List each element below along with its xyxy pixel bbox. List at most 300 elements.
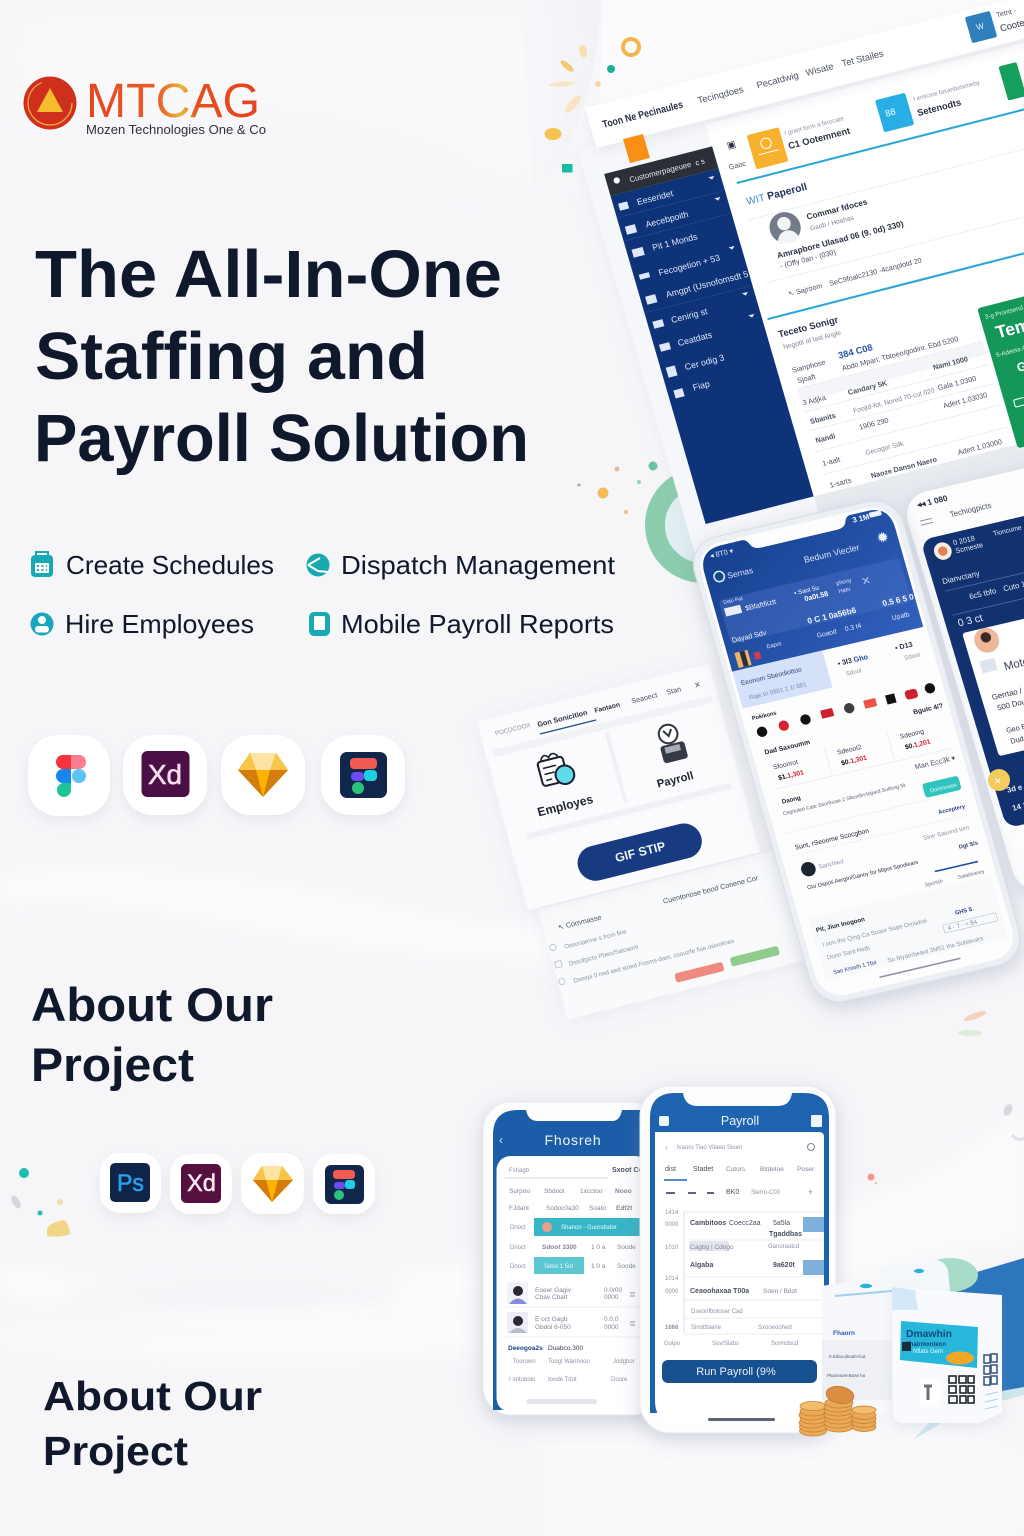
phone B table: Soen / Bdot — [763, 1288, 797, 1295]
phone A people rows: 0000 — [604, 1324, 619, 1331]
payroll table: 3 Adjka — [801, 393, 828, 407]
icon: sketch — [221, 735, 305, 815]
phone 1 stats: Man Ecc3k ▾ — [914, 753, 957, 771]
phone B table: Ganoraatcd — [768, 1244, 799, 1250]
phone 1 header: Goaod — [816, 628, 838, 640]
logo: Mozen Technologies One & Co — [86, 123, 266, 137]
icon: figma dark — [313, 1154, 375, 1214]
phone B table: Sov/Slabs — [712, 1341, 739, 1347]
phone A table: Fshagb — [509, 1168, 530, 1174]
section heading: about our project repeat: About Our — [43, 1373, 262, 1419]
modal lower card — [538, 847, 818, 1020]
phone 2 blue panel: 6c5 tbfo — [968, 586, 997, 601]
phone 1 header: 0 C 1 0a56b6 — [806, 606, 858, 626]
icon: adobe xd: Xd — [187, 1170, 216, 1197]
phone 1 header: ✹ — [875, 529, 891, 547]
payroll table: Negotit of last Angle — [782, 330, 842, 351]
decorations: green ring and dots — [578, 462, 751, 573]
phone 1 stats — [763, 708, 957, 804]
phone 1 details list: Our Dspos Aergtn/Ganoy for Mtpnt Spndiears — [807, 860, 919, 891]
phone B table: Ceaoohaxaa T00a — [690, 1288, 749, 1295]
phone 1 footer: Sao Krooth 1 Tfot — [833, 960, 878, 976]
phone 1 details list: Dgt S/s — [958, 840, 979, 851]
phone 2 blue panel: Tioncume — [992, 524, 1023, 538]
phone 1 tab strip — [732, 629, 924, 709]
phone A table: Dnoct — [510, 1264, 526, 1270]
phone B table: Goipo — [664, 1341, 681, 1347]
stat tiles — [720, 62, 1024, 176]
phone 2 card — [962, 586, 1024, 756]
button: get started — [574, 820, 706, 884]
coin stacks — [799, 1384, 876, 1436]
phone A table: Surpoo — [509, 1188, 530, 1195]
phone B screen — [650, 1093, 829, 1425]
phone 1 details list: Sanchied — [818, 858, 845, 871]
phone 1 header: Bedum Viecler — [803, 542, 861, 565]
phone 1 tab strip: Raje tn 0881 1 1/ 881 — [748, 681, 808, 701]
sidebar: Cenirig st — [670, 306, 709, 325]
payroll table — [777, 282, 1012, 492]
phone 1 header: ◂ 8T0 ▾ — [709, 546, 735, 560]
phone 1 details list: Daong — [781, 795, 802, 806]
phone 1 header: Dsto Pat — [723, 596, 744, 606]
phone B tabs — [664, 1142, 815, 1197]
sidebar: Pit 1 Monds — [651, 231, 699, 253]
phone 2 status: ◂◂ 1 080 — [915, 494, 949, 510]
phone 2 body — [900, 441, 1024, 897]
phone 1 header: Eapot — [766, 641, 783, 650]
coin stack left — [799, 1402, 826, 1436]
icon: figma dark — [321, 735, 405, 815]
phone 1 header: $Bfaftfiiztt — [744, 597, 777, 613]
icon: photoshop — [100, 1153, 161, 1213]
phone 2 lower values — [1006, 782, 1024, 813]
phone 1 quick icons: Pokikons — [751, 711, 777, 722]
payroll table: Candary 5K — [847, 378, 889, 397]
phone A table: Sdoo 1 5ot — [544, 1264, 573, 1270]
product box small: Fhaorn — [833, 1330, 855, 1337]
icon: mobile — [309, 612, 330, 636]
phone A people rows: 0.0/00 — [604, 1287, 622, 1294]
payroll table: 1-sarts — [829, 475, 853, 490]
phone 2 lower values: 3d e — [1006, 782, 1024, 795]
phone A footer rows: I ontobolo — [509, 1377, 536, 1383]
phone 1 header: 0a0t.58 — [803, 589, 829, 603]
phone 1 header: ✕ — [860, 575, 873, 589]
payroll table: Teceto Sonigr — [777, 315, 840, 339]
stat tiles: 88 — [884, 107, 897, 119]
feature: hire employees: Hire Employees — [65, 609, 254, 639]
top navigation bar: Tetnt - — [995, 6, 1018, 19]
phone B table: 0000 — [665, 1289, 679, 1295]
lower phone A — [483, 1102, 661, 1415]
section heading: about our project — [31, 978, 273, 1091]
phone 1 footer: Donn Sant Hetb — [826, 945, 871, 961]
modal card — [477, 657, 818, 1022]
phone 1 tab strip: Eeonom Sbeodiottoo — [740, 666, 803, 687]
modal background — [477, 664, 760, 910]
phone A footer rows — [508, 1345, 635, 1404]
phone A screen — [493, 1110, 650, 1412]
phone B frame — [640, 1086, 836, 1433]
phone 2 blue panel: Dianvctany — [941, 569, 981, 586]
feature: create schedules: Create Schedules — [66, 550, 274, 580]
phone A footer rows: Ioode Tdot — [548, 1377, 577, 1383]
phone B table: 0000 — [665, 1222, 679, 1228]
phone A frame — [483, 1102, 661, 1415]
payroll table: Abdo Mpan; Tbtoeo/godinr. Ebd 5200 — [841, 334, 959, 373]
title: Payroll Solution — [34, 401, 529, 476]
icon: figma — [28, 735, 110, 816]
icon: dispatch — [306, 554, 330, 576]
phone 1 details list: Acceptery — [938, 804, 967, 816]
stat tiles: C1 Ootemnent — [787, 126, 851, 151]
tile: employees: Employes — [536, 792, 595, 819]
sidebar: Eeseridet — [636, 188, 675, 207]
payroll table: Naoze Dansn Naero — [870, 455, 939, 480]
phone 1 stats: $0.1,201 — [904, 739, 932, 751]
phone A table: FJdant — [509, 1205, 529, 1212]
product box large — [877, 1260, 1002, 1423]
button: run payroll — [662, 1360, 817, 1383]
phone A table: Sodoc0a30 — [546, 1205, 579, 1212]
feature: mobile payroll reports: Mobile Payroll Reports — [341, 609, 614, 639]
phone B tabs: BK0 — [726, 1189, 739, 1196]
phone A table: Sdoot 3300 — [542, 1244, 577, 1251]
phone 2 blue panel: Scmeste — [954, 540, 984, 555]
phone 1 stats: Sdeoing — [899, 728, 925, 741]
payroll table: 1-aalt — [821, 455, 841, 468]
coin stack center — [824, 1384, 855, 1432]
phone B table: 5a5la — [773, 1220, 790, 1227]
phone 1 header: phony — [836, 578, 852, 587]
phone B tabs: dist — [665, 1166, 676, 1173]
phone B table: 1414 — [665, 1210, 679, 1216]
icon: adobe xd — [170, 1154, 232, 1214]
phone A footer rows: Toorown — [513, 1359, 536, 1365]
icon: employee — [30, 612, 54, 636]
dashboard panel — [567, 0, 1024, 563]
phone 1 tab strip: Sdoot — [845, 667, 863, 678]
phone A screen: ‹ — [499, 1133, 503, 1147]
phone A table: Dnoct — [510, 1245, 526, 1251]
phone 1 stats: Dad Saxoumm — [764, 739, 811, 756]
phone 1 details list: Satadeaney — [957, 869, 986, 881]
modal tabs: × — [693, 680, 702, 692]
sidebar: Ceatdats — [677, 330, 714, 348]
phone 1 frame — [686, 495, 1024, 1008]
modal tabs: Faotaon — [594, 702, 621, 715]
box banner — [900, 1321, 978, 1368]
phone 1 header: 0.5 6 5 0 — [881, 592, 915, 608]
top navigation bar: Pecatdwig — [755, 70, 800, 90]
top navigation bar: Wisate — [804, 61, 835, 78]
phone B tabs: ‹ — [665, 1142, 668, 1152]
phone 2 blue panel: 0 3 ct — [957, 613, 984, 629]
decorations: left confetti — [9, 1168, 70, 1237]
stat tiles: I enticine faxanbotxmeby — [912, 79, 982, 103]
box banner: Nflats Gem — [913, 1349, 943, 1355]
phone 2 blue panel — [920, 484, 1024, 828]
phone B screen: Payroll — [721, 1114, 759, 1128]
phone 1 footer: Pit, Jiun Inogoon — [815, 916, 866, 934]
phone 1 footer: GHS S — [955, 907, 973, 917]
phone A table: 1 0 a — [591, 1263, 606, 1270]
feature list — [30, 550, 616, 639]
phone A footer rows: Jodgbor — [613, 1359, 635, 1365]
product box small: Ploonnont-Bose ho — [827, 1373, 866, 1378]
phone 1 details list: Donmoase — [930, 782, 958, 794]
title: Staffing and — [35, 319, 428, 394]
modal tabs: Seaoect — [630, 690, 658, 705]
icon: gold coin badge — [988, 769, 1010, 791]
logo: MTCAG — [86, 75, 260, 128]
phone 1 quick icons — [751, 674, 944, 752]
phone A people rows: 0.0.0 — [604, 1316, 619, 1323]
top navigation bar: Toon Ne Pecinaules — [601, 100, 685, 131]
phone B table: Algaba — [690, 1262, 713, 1269]
top navigation bar — [585, 0, 1024, 148]
top navigation bar: Tet Stailes — [840, 48, 885, 69]
phone 1 tab strip: Sdoot — [903, 651, 921, 662]
phone 1 header: Sernas — [726, 566, 754, 581]
employee profile — [741, 101, 1024, 303]
phone A footer rows: Toogt Wanhooo — [548, 1359, 590, 1365]
phone B table: Cagbg | Cdogo — [690, 1244, 734, 1251]
modal tabs: Gon Sonicition — [536, 708, 588, 729]
phone B table: Cambitoos — [690, 1220, 726, 1227]
phone 2 status — [914, 485, 993, 526]
tile: payroll — [643, 722, 695, 791]
tool icons row 1 — [28, 735, 405, 816]
phone A table — [505, 1167, 649, 1274]
payroll table: Gala 1.0300 — [937, 374, 977, 392]
phone 1 header — [698, 506, 923, 672]
phone 1 footer: I oon the Qing Ca Soaor Sope Omsdoe — [822, 917, 929, 949]
icon: sketch — [241, 1153, 304, 1214]
stat tiles: ▣ — [726, 139, 737, 151]
title — [34, 237, 529, 476]
phone B table: Sxooeoohed — [758, 1325, 792, 1331]
section heading: about our project: About Our — [31, 978, 273, 1031]
icon: calendar — [31, 552, 53, 577]
blue backdrop — [913, 1258, 1024, 1440]
phone 1 header: Dayad Sdv — [731, 628, 768, 645]
checklist: Dseepi 0 ned aed stoed Fosms-daet, cooutrfe fise osivolines — [573, 938, 735, 985]
sidebar — [604, 146, 814, 524]
sidebar: Fecogetion + 53 — [657, 252, 721, 278]
phone B table — [664, 1210, 824, 1347]
phone A people rows: Cbav Cbatt — [535, 1294, 568, 1301]
phone A footer rows: Doore — [611, 1377, 628, 1383]
phone A people rows: Gbdoi 6-050 — [535, 1324, 571, 1331]
sidebar: Cer odig 3 — [683, 352, 726, 372]
phone B table: Sormdocd — [771, 1341, 798, 1347]
phone A table: Edf2t — [616, 1205, 633, 1212]
product box small: 0 trdca-dnoeb-fcot — [829, 1354, 866, 1359]
phone A people rows: E oct Gagb — [535, 1316, 568, 1323]
phone 1 stats: Sdeoot2 — [836, 744, 863, 757]
payroll table: 384 C08 — [837, 342, 874, 361]
section heading: about our project: Project — [31, 1038, 194, 1091]
top navigation bar: Tecinqdoes — [696, 84, 745, 106]
decorations: top sparkle — [544, 39, 639, 172]
phone A table: Dnoct — [510, 1225, 526, 1231]
phone 1 header: ▪ Saot 5u — [793, 584, 820, 597]
phone A people rows: 0000 — [604, 1294, 619, 1301]
employee profile: SeC9foalc2130 -4canplotd 20 — [828, 256, 923, 288]
product box small — [822, 1281, 892, 1413]
feature: dispatch management: Dispatch Management — [341, 550, 616, 580]
green promo card — [977, 278, 1024, 448]
phone A table: Shanon - Guondsdor — [561, 1225, 617, 1231]
box stamp — [920, 1380, 940, 1407]
home indicator — [880, 958, 961, 977]
phone 1 details list: Cegnoted Cate Seorfouse 2 Sfeonfin-fogard Sotfong 5k — [782, 783, 907, 817]
stat tiles: Setenodts — [916, 97, 962, 118]
payroll table: Adert 1.03030 — [942, 390, 988, 410]
phone A people rows — [505, 1282, 640, 1337]
box banner: Fhairmonteon — [906, 1342, 946, 1348]
icon: adobe xd — [123, 735, 207, 815]
phone A footer rows: Duabco.300 — [548, 1345, 583, 1352]
checklist — [544, 873, 774, 988]
decorations: lower right — [868, 1009, 1024, 1184]
payroll table: 1906 290 — [858, 416, 890, 432]
phone B tabs: Poser — [797, 1166, 815, 1173]
icon: photoshop: Ps — [117, 1170, 144, 1197]
employee profile: WIT Paperoll — [745, 182, 809, 208]
phone B tabs: Stadet — [693, 1166, 713, 1173]
phone B table: Sinottbaine — [691, 1325, 722, 1331]
payroll table: Sjoaft — [796, 372, 816, 385]
phone 1 header: 3 1M — [851, 512, 870, 525]
payroll table: Gecogor Sdk — [865, 440, 905, 457]
checklist: Ossonperne s from fine — [564, 928, 628, 951]
payroll table: Adert 1.03000 — [957, 437, 1003, 457]
box banner: Dmawhin — [906, 1329, 952, 1340]
title: The All-In-One — [35, 237, 502, 312]
section heading: about our project repeat — [43, 1373, 262, 1474]
red bar — [674, 962, 725, 983]
phone 1 footer: 4 · 7 · + $4 — [947, 918, 979, 932]
phone A table: 1xcctoo — [580, 1188, 603, 1195]
icon: adobe xd: Xd — [148, 759, 182, 790]
section heading: about our project repeat: Project — [43, 1428, 188, 1474]
logo — [24, 75, 266, 137]
phone 1 details list: Sunt, rSeoome Scocgbon — [794, 828, 870, 852]
sidebar: c s — [694, 156, 706, 167]
phone A table: Soode — [617, 1244, 636, 1251]
phone A table: Soode — [617, 1263, 636, 1270]
phone 1 quick icons: Bgutc 4/? — [912, 703, 944, 716]
phone A table: Soato — [589, 1205, 606, 1212]
phone 1 header: Upatb — [891, 611, 911, 622]
phone 1 footer: So Mydorbeted 3M51 the Sotsteolrs — [887, 935, 984, 964]
sidebar: Amgpt (Usnofomsdt 5 — [665, 269, 750, 300]
phone 1 center — [686, 495, 1024, 1008]
phone A table: Sxoot Cow — [612, 1167, 649, 1174]
phone 2 right — [900, 439, 1024, 897]
phone B table: 1666 — [665, 1325, 679, 1331]
checklist: ↖ Commasse — [557, 912, 602, 932]
modal tabs — [488, 678, 713, 757]
phone 2 status: Techiogpicts — [949, 501, 993, 519]
coin stack right — [852, 1406, 876, 1432]
tool icons row 2 — [100, 1153, 375, 1214]
payroll table: Nandi — [814, 431, 836, 445]
phone 1 details list: Sine Saeond lorn — [922, 824, 971, 842]
sidebar: Aecebpoith — [644, 209, 690, 230]
box qr codes — [949, 1354, 997, 1403]
phone 2 blue panel: 0 2018 — [952, 534, 976, 547]
phone 1 tab strip: ▪ 3l3 Gho — [836, 652, 869, 668]
phone 1 stats: Sfoonrot — [772, 759, 799, 771]
phone 1 stats: $1.1,301 — [778, 769, 805, 782]
modal tabs: Stan — [665, 684, 682, 697]
phone B tabs: Sierro-C00 — [751, 1190, 781, 1196]
phone B table: Dseonfbotoser Cad — [691, 1309, 743, 1315]
employee profile: - (Offy 0an - (030) — [779, 247, 837, 270]
cyan dividers — [729, 71, 1024, 319]
dashboard body — [578, 0, 1024, 563]
employee profile: ↖ Sajroom — [787, 281, 823, 298]
phone A table: Sbdoot — [544, 1188, 565, 1195]
phone B table: Coecc2aa — [729, 1220, 761, 1227]
phone B table: 1010 — [665, 1245, 679, 1251]
checklist: Cuentonose bood Conene Cor — [662, 873, 760, 906]
tile: payroll: Payroll — [656, 770, 695, 791]
home indicator — [708, 1418, 775, 1421]
phone 1 details list — [775, 758, 988, 916]
button: run payroll: Run Payroll (9% — [696, 1366, 776, 1378]
phone B tabs: Bitdetoe — [760, 1166, 784, 1173]
sidebar: Fiap — [692, 379, 711, 393]
phone A table: Nooo — [615, 1188, 632, 1195]
phone B tabs: + — [808, 1187, 813, 1197]
phone B tabs: Cutors — [726, 1166, 746, 1173]
orange tab — [623, 134, 650, 163]
top navigation bar: W — [975, 20, 985, 32]
phone 1 tab strip: ▪ D13 — [894, 640, 914, 652]
employee profile: Commar fdoces — [805, 196, 869, 222]
checklist: Dssofgicto Pbeo/Satoaont — [568, 944, 640, 968]
phone B table: 9a620t — [773, 1262, 795, 1269]
phone 1 header: Hato — [838, 587, 851, 595]
phone 2 card: Gerrtao / — [991, 686, 1024, 702]
phone 1 header: 0.3 t4 — [844, 623, 863, 633]
phone A table: 1 0 a — [591, 1244, 606, 1251]
employee profile: Gaob / Hoahas — [809, 215, 855, 233]
phone B table: Tgaddbas — [769, 1231, 802, 1238]
phone A footer rows: Deeogoa2s — [508, 1345, 543, 1352]
phone 1 stats: $0.1,301 — [841, 755, 868, 767]
payroll table: Nami 1000 — [932, 354, 969, 372]
phone 1 footer — [808, 876, 1011, 989]
phone B tabs: Ivaoro Tiao Vitaeo Sioen — [677, 1145, 742, 1151]
sidebar: Customerpageuee — [628, 160, 692, 184]
green bar — [730, 946, 780, 967]
phone 1 details list: Sponish — [924, 878, 944, 889]
phone A screen: Fhosreh — [545, 1132, 601, 1148]
modal tabs: POCOCOOX — [494, 722, 531, 737]
employee profile: Amrapbore Ulasad 06 (9. 0d) 330) — [776, 218, 905, 260]
button: get started: GIF STIP — [613, 839, 667, 865]
stat tiles: I grant form a ferocate — [784, 115, 845, 137]
lower phone B — [640, 1086, 836, 1433]
icon: gold coin badge: ✕ — [994, 776, 1002, 786]
phone B table: 1014 — [665, 1276, 679, 1282]
